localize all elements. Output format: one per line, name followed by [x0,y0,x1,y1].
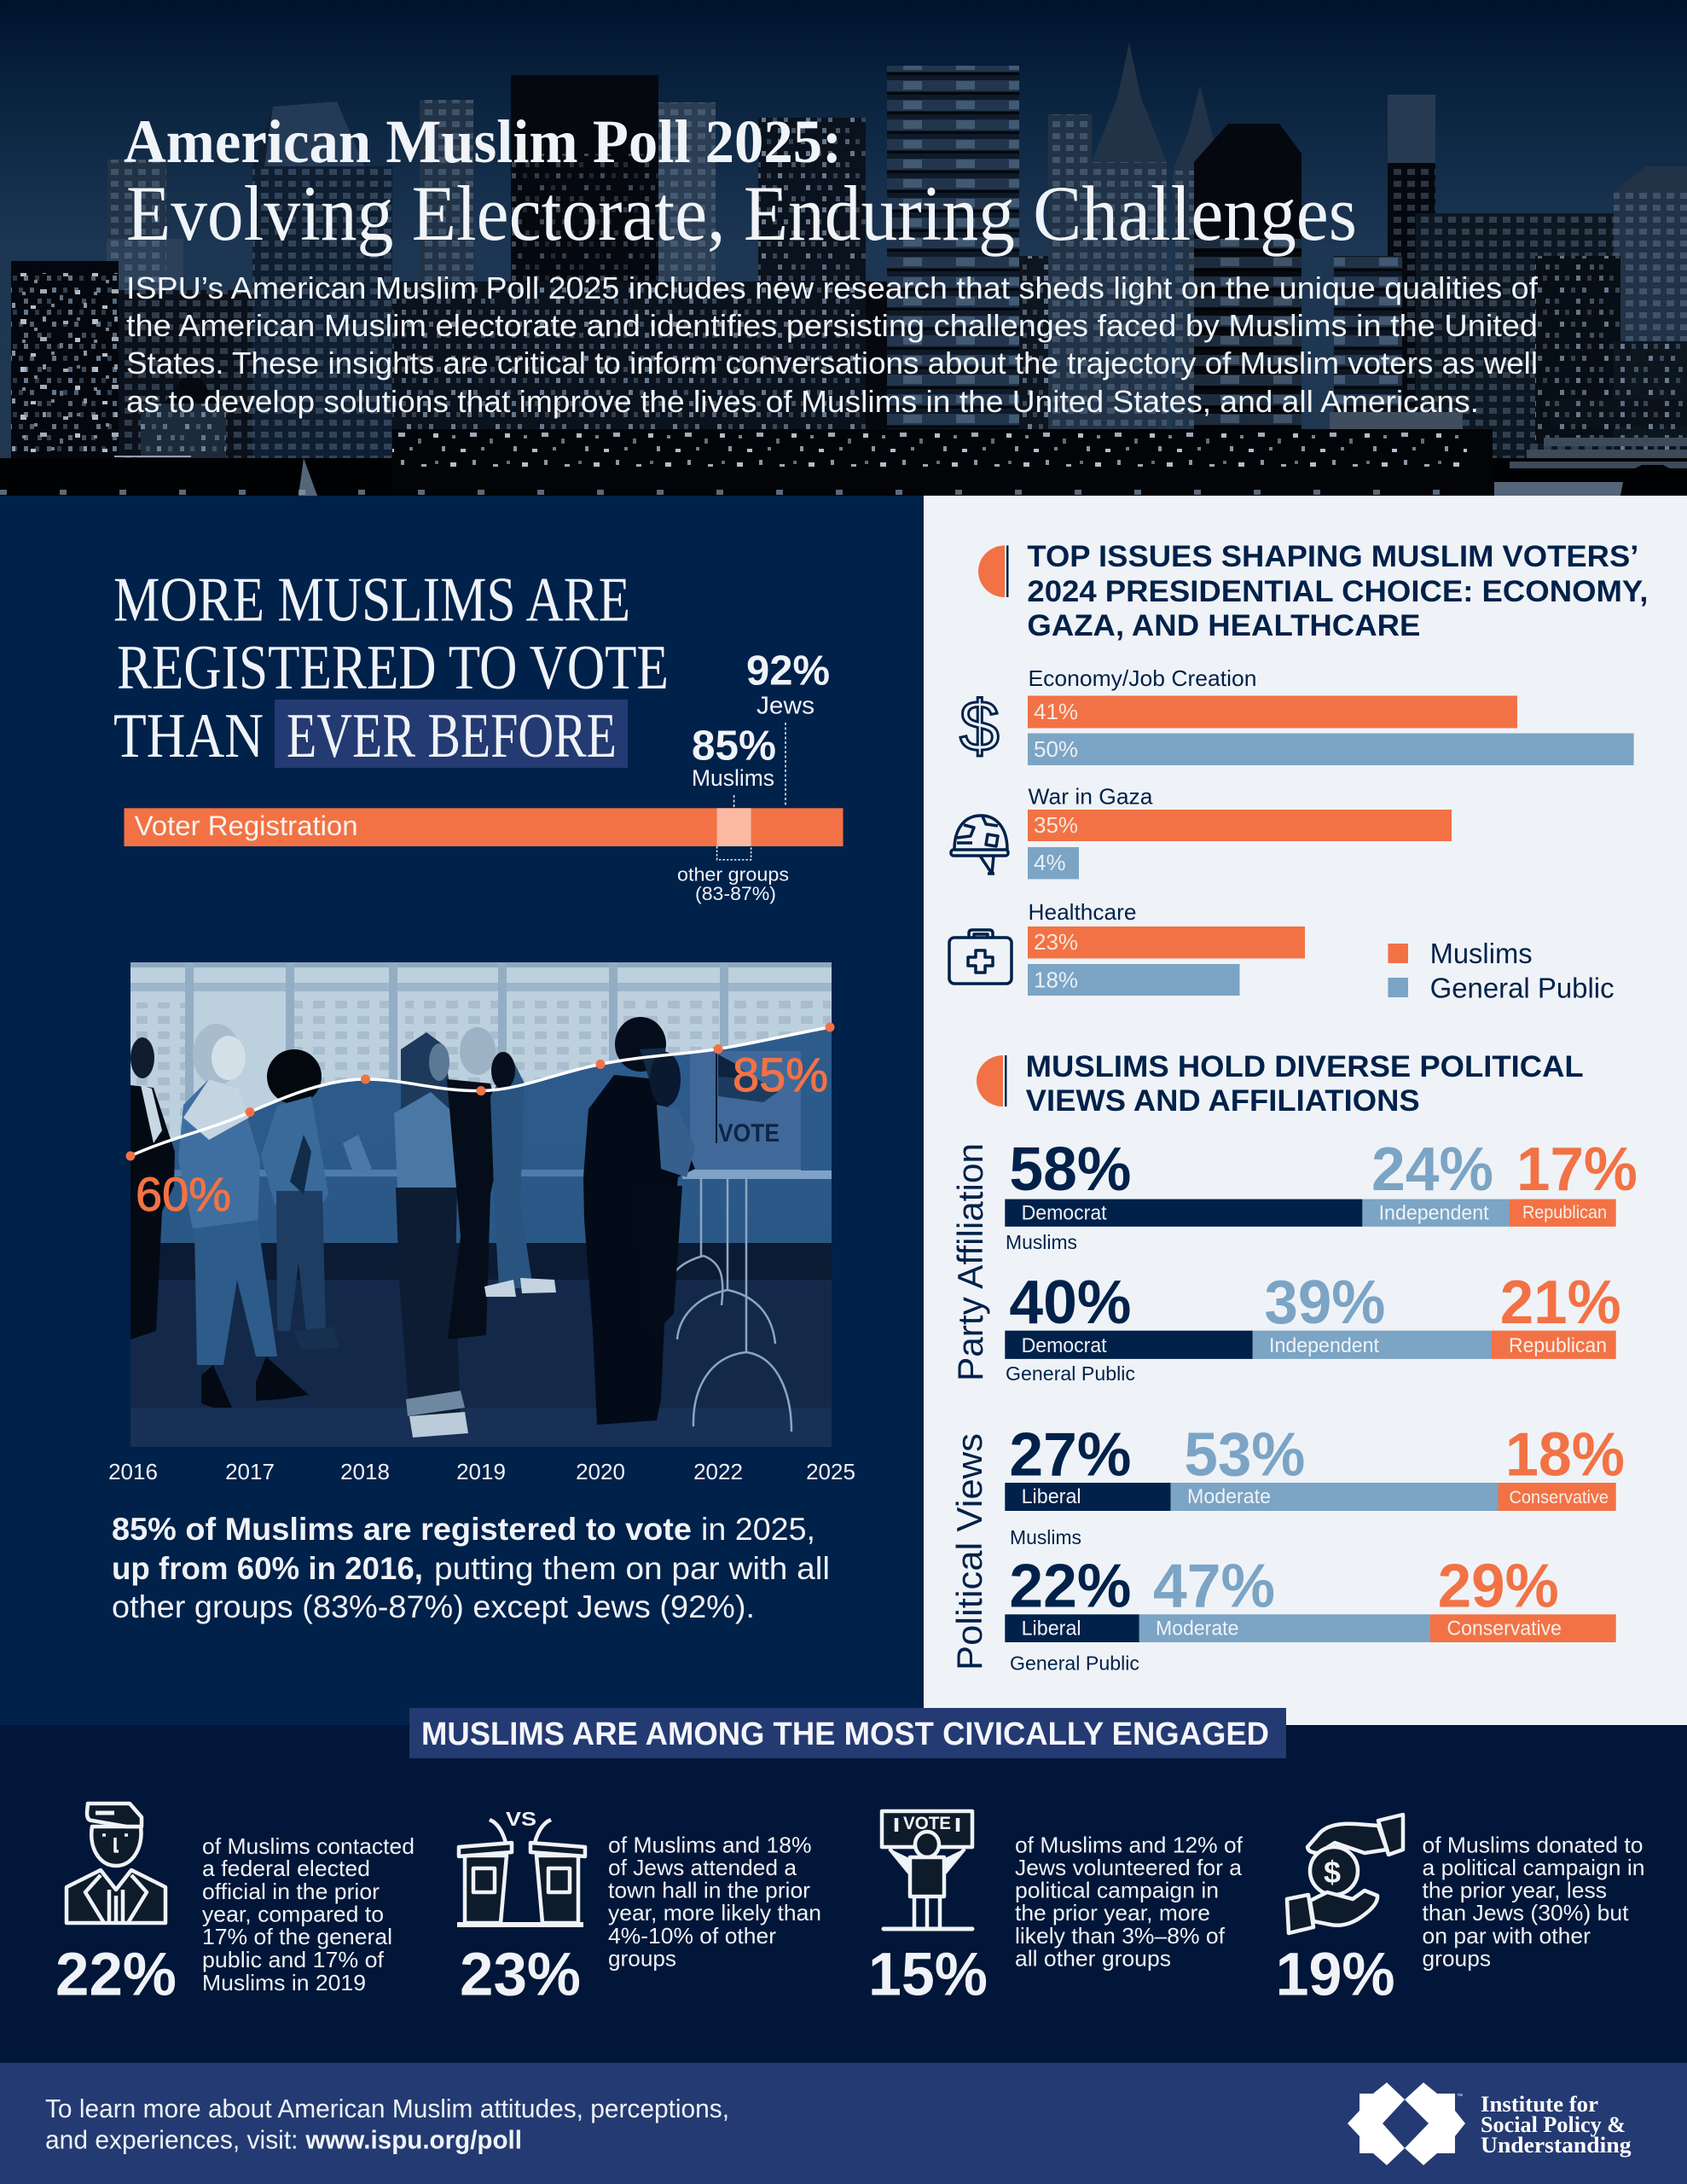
stat: contacted official: 17% of the general [202,1924,392,1949]
title: Evolving Electorate, Enduring Challenges [126,170,1357,257]
bar group: Gaza: War in Gaza [1029,783,1153,809]
stacked bar: party, Muslims: 17% [1516,1136,1638,1204]
stat: town hall: of Jews attended a [608,1855,797,1880]
chart x-axis years: 2016 [108,1459,158,1484]
icon: debate podiums: VS [506,1808,536,1830]
stat: donated [1276,1815,1644,2009]
stat: town hall [457,1808,821,2009]
text block: registration summary: up from 60% in 2016, [112,1551,423,1586]
stacked bar: party, Muslims: Muslims [1006,1231,1077,1253]
stacked bar: party, general public [1005,1269,1621,1385]
heading: more Muslims registered [113,566,669,771]
chart x-axis years: 2022 [693,1459,743,1484]
stat: volunteered: of Muslims and 12% of [1015,1832,1244,1857]
callout: other groups [677,846,789,904]
stacked bar: views, Muslims: Moderate [1187,1485,1271,1508]
stat: town hall: town hall in the prior [608,1878,810,1903]
value label: 85%: 85% [733,1048,828,1101]
stat: contacted official: public and 17% of [202,1947,385,1972]
text block: registration summary: putting them on par with all [434,1551,830,1586]
icon: hands with coin [1287,1815,1403,1933]
footer [0,2063,1687,2184]
panel: right column [924,496,1687,1725]
icon: dollar: $ [959,686,1000,766]
axis label: political views: Political Views [949,1433,989,1670]
stat: town hall: 4%-10% of other [608,1923,776,1949]
stacked bar: views, general public: 47% [1153,1553,1275,1621]
chart x-axis years: 2017 [225,1459,275,1484]
text block: registration summary [112,1512,830,1624]
bar group: economy: Economy/Job Creation [1029,665,1257,691]
stacked bar: views, general public [1005,1553,1616,1675]
banner heading [409,1708,1286,1758]
logo: ISPU wordmark: Institute for [1481,2092,1598,2117]
bar group: Gaza: 4% [1034,850,1066,875]
chart x-axis years: 2019 [456,1459,506,1484]
bar group: economy: 41% [1034,699,1078,724]
callout: Muslims 85%: 85% [692,723,776,770]
icon: vote sign holder [882,1811,972,1929]
stacked bar: party, general public: 21% [1500,1269,1621,1337]
heading: more Muslims registered: THAN [113,701,264,771]
stat: contacted official [55,1804,415,2009]
stacked bar: party, Muslims: 24% [1371,1136,1493,1204]
stacked bar: views, general public: 29% [1438,1553,1559,1621]
logo: ISPU star mark [1348,2082,1465,2165]
bar group: Gaza [1028,783,1452,879]
heading: diverse views [1026,1050,1584,1118]
stat: volunteered: the prior year, more [1015,1900,1210,1926]
stacked bar: party, Muslims [1005,1136,1638,1253]
heading: top issues: 2024 PRESIDENTIAL CHOICE: ECONOMY, [1027,575,1648,608]
trend line [126,1022,834,1160]
stat: volunteered: political campaign in [1015,1878,1219,1903]
chart x-axis years: 2020 [576,1459,625,1484]
stat: town hall: of Muslims and 18% [608,1832,812,1857]
chart x-axis years: 2018 [340,1459,390,1484]
value label: 60%: 60% [136,1167,231,1221]
stacked bar: party, general public: Republican [1509,1334,1607,1357]
back buildings [107,43,1687,496]
stacked bar: views, general public: Liberal [1022,1617,1081,1640]
stacked bar: party, general public: Independent [1269,1334,1379,1357]
stacked bar: views, Muslims: 53% [1184,1421,1305,1490]
title [124,107,1357,257]
legend [1388,938,1615,1003]
stat: volunteered: 15% [868,1942,988,2009]
stacked bar: party, general public: 40% [1009,1269,1131,1337]
logo: ISPU wordmark: ™ [1457,2094,1463,2100]
heading: more Muslims registered: EVER BEFORE [287,701,617,771]
title: American Muslim Poll 2025: [124,107,842,176]
bar group: economy [1028,665,1634,765]
stacked bar: views, Muslims: Liberal [1022,1485,1081,1508]
text block: registration summary: in 2025, [701,1512,815,1547]
bar group: healthcare: 23% [1034,929,1078,955]
section: top issues [949,540,1648,1003]
stacked bar: views, Muslims [1005,1421,1625,1548]
stat: volunteered: Jews volunteered for a [1015,1855,1243,1880]
icon: hands with coin: $ [1324,1855,1341,1890]
stat: contacted official: 22% [55,1942,177,2009]
stacked bar: views, general public: Conservative [1446,1617,1562,1640]
stacked bar: party, general public: Democrat [1022,1334,1107,1357]
stat: contacted official: a federal elected [202,1856,370,1881]
icon: medical kit [949,930,1012,984]
stat: town hall: year, more likely than [608,1900,821,1926]
callout: other groups: other groups [677,864,789,886]
stacked bar: party, general public: 39% [1264,1269,1385,1337]
heading: diverse views: MUSLIMS HOLD DIVERSE POLITICAL [1026,1050,1584,1083]
intro text block: as to develop solutions that improve the lives of Muslims in the United States, and all Americans. [126,384,1479,419]
mid buildings [252,102,392,496]
stat: donated: on par with other [1423,1923,1591,1949]
heading: more Muslims registered: REGISTERED TO VOTE [117,633,669,703]
stat: volunteered: all other groups [1015,1946,1171,1972]
legend: Muslims [1430,938,1533,969]
stacked bar: party, Muslims: Democrat [1022,1202,1107,1225]
stat: donated: 19% [1276,1942,1395,2009]
chart x-axis years [108,1459,855,1484]
chart x-axis years: 2025 [806,1459,855,1484]
footer text: To learn more about American Muslim attitudes, perceptions, [45,2094,729,2123]
stat: contacted official: year, compared to [202,1901,384,1926]
legend: General Public [1430,973,1615,1003]
panel: civic engagement [0,1708,1687,2063]
stat: donated: the prior year, less [1423,1878,1607,1903]
stat: donated: groups [1423,1946,1491,1972]
stat: volunteered: likely than 3%–8% of [1015,1923,1226,1949]
stacked bar: party, Muslims: Republican [1522,1203,1607,1223]
stacked bar: views, general public: 22% [1009,1553,1131,1621]
heading: top issues [1027,540,1648,642]
intro text block: the American Muslim electorate and identifies persisting challenges faced by Muslims in the United [126,308,1538,343]
footer text [45,2094,729,2155]
callout: Jews 92% [746,648,830,807]
icon: debate podiums [457,1808,585,1925]
callout: Jews 92%: Jews [757,693,815,720]
heading: top issues: TOP ISSUES SHAPING MUSLIM VOTERS’ [1027,540,1638,573]
stat: volunteered [868,1811,1244,2009]
stacked bar: party, Muslims: Independent [1379,1202,1489,1225]
icon: official [67,1804,165,1923]
bar group: Gaza: 35% [1034,812,1078,838]
intro text block: ISPU’s American Muslim Poll 2025 includes new research that sheds light on the unique qualities of [126,270,1539,305]
stacked bar: views, Muslims: Conservative [1510,1488,1609,1507]
chart: photo with registration trend line: VOTE [718,1119,780,1147]
footer text: www.ispu.org/poll [304,2125,522,2155]
icon: helmet [951,816,1008,874]
footer text: and experiences, visit: [45,2125,299,2155]
heading: more Muslims registered: MORE MUSLIMS ARE [113,566,630,636]
intro text block: States. These insights are critical to inform conversations about the trajectory of Muslim voters as well [126,346,1538,380]
stacked bar: views, general public: Moderate [1156,1617,1238,1640]
axis label: party affiliation: Party Affiliation [950,1143,990,1381]
stacked bar: party, general public: General Public [1006,1362,1135,1385]
chart: photo with registration trend line [108,962,855,1484]
people [130,1017,695,1438]
heading: diverse views: VIEWS AND AFFILIATIONS [1026,1084,1420,1118]
bar group: healthcare: Healthcare [1029,899,1136,925]
voter registration bar [125,808,843,846]
heading: top issues: GAZA, AND HEALTHCARE [1027,609,1420,642]
booth [690,1051,801,1170]
stat: donated: than Jews (30%) but [1423,1900,1629,1926]
stacked bar: views, Muslims: 27% [1009,1421,1131,1490]
callout: Jews 92%: 92% [746,648,830,694]
bar group: healthcare [1028,899,1305,996]
logo: ISPU wordmark: Social Policy & [1481,2112,1626,2137]
logo: ISPU wordmark [1457,2092,1631,2158]
stat: donated: of Muslims donated to [1423,1832,1643,1857]
text block: registration summary: other groups (83%-87%) except Jews (92%). [112,1589,755,1624]
stat: town hall: groups [608,1946,676,1972]
stacked bar: party, Muslims: 58% [1009,1136,1131,1204]
low foreground [1330,412,1463,429]
stat: donated: a political campaign in [1423,1855,1644,1880]
bar group: economy: 50% [1034,736,1078,762]
section: political views [949,1050,1638,1675]
voter registration bar: Voter Registration [135,810,358,841]
intro text block [126,270,1539,419]
stacked bar: views, Muslims: 18% [1505,1421,1625,1490]
stat: contacted official: Muslims in 2019 [202,1970,366,1995]
banner heading: MUSLIMS ARE AMONG THE MOST CIVICALLY ENGAGED [421,1716,1269,1752]
text block: registration summary: 85% of Muslims are registered to vote [112,1512,692,1547]
bar group: healthcare: 18% [1034,967,1078,993]
stat: town hall: 23% [460,1942,581,2009]
callout: Muslims 85% [692,723,776,807]
header panel: skyline background [0,0,1687,496]
callout: Muslims 85%: Muslims [692,765,774,791]
icon: half circle marker [978,545,1008,597]
stacked bar: views, Muslims: Muslims [1010,1526,1081,1548]
icon: vote sign holder: VOTE [903,1814,951,1833]
icon: half circle marker [977,1055,1006,1107]
callout: other groups: (83-87%) [695,883,776,904]
logo: ISPU wordmark: Understanding [1481,2133,1631,2158]
stat: contacted official: official in the prior [202,1879,380,1904]
stacked bar: views, general public: General Public [1010,1653,1139,1675]
panel: voter registration [109,578,855,1624]
stat: contacted official: of Muslims contacted [202,1833,415,1859]
